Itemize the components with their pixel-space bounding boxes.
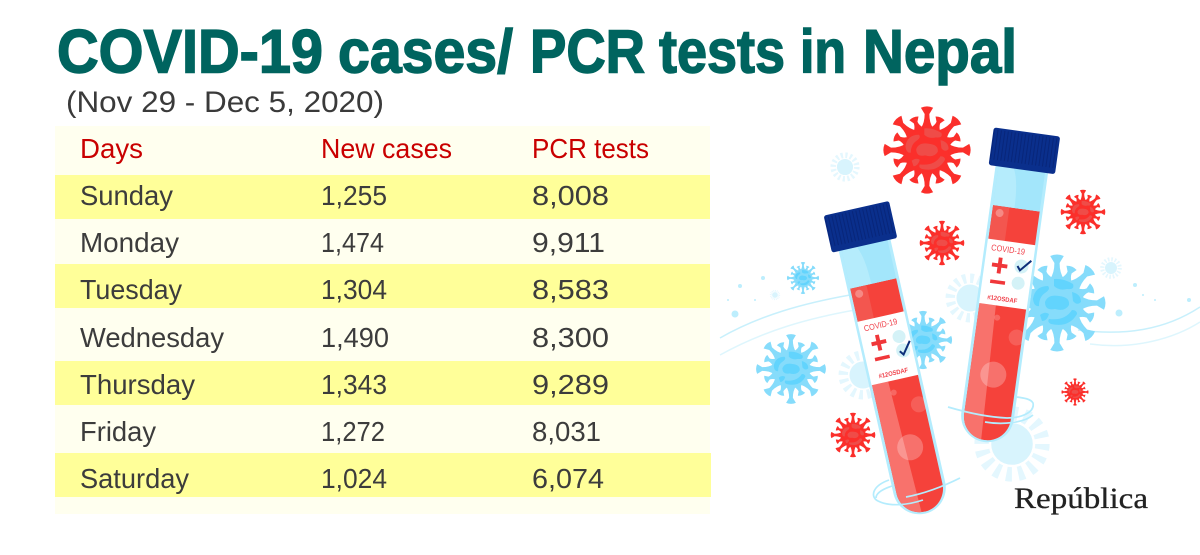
row: Tuesday — [80, 274, 609, 305]
row: Sunday: 1,255 — [321, 180, 387, 211]
icon: check mark — [1014, 259, 1031, 275]
icon: plus — [991, 257, 1008, 274]
row: Friday — [80, 416, 601, 447]
brand: República: República — [1014, 482, 1148, 515]
table header: New cases — [321, 133, 452, 164]
red viruses — [831, 106, 1105, 457]
row: Tuesday: 8,583 — [532, 274, 609, 305]
label text: COVID-19: COVID-19 — [863, 316, 898, 333]
row: Monday: 1,474 — [321, 227, 384, 258]
row: Saturday: 1,024 — [321, 463, 387, 494]
row: Saturday: Saturday — [80, 463, 189, 494]
row: Friday: 8,031 — [532, 416, 601, 447]
icon: minus — [990, 279, 1005, 285]
subtitle: date range: (Nov 29 - Dec 5, 2020) — [66, 86, 384, 119]
row: Wednesday: 8,300 — [532, 322, 609, 353]
row: Wednesday — [80, 322, 609, 353]
swirl rings around tube bases — [873, 397, 1033, 505]
table header: Days — [80, 133, 143, 164]
icon: plus — [870, 333, 888, 352]
row: Monday — [80, 227, 605, 258]
title: PCR — [530, 18, 645, 86]
row: Monday: Monday — [80, 227, 179, 258]
icon: pale circle — [1011, 276, 1025, 291]
row: Saturday: 6,074 — [532, 463, 604, 494]
icon: pale circle — [891, 329, 907, 344]
row: Tuesday: 1,304 — [321, 274, 387, 305]
label text: COVID-19: COVID-19 — [991, 242, 1026, 257]
icon: minus — [875, 355, 890, 361]
row: Sunday: 8,008 — [532, 180, 609, 211]
row: Friday: 1,272 — [321, 416, 385, 447]
title: COVID-19 — [57, 18, 323, 86]
row: Thursday: 9,289 — [532, 369, 609, 400]
illustration: background swirl lines and dots — [720, 276, 1200, 355]
test tube: right — [950, 127, 1060, 451]
blue viruses — [756, 254, 1106, 404]
row: Thursday: 1,343 — [321, 369, 387, 400]
row: Monday: 9,911 — [532, 227, 605, 258]
title: tests — [659, 18, 785, 86]
row: Tuesday: Tuesday — [80, 274, 182, 305]
table header — [80, 133, 649, 164]
row: Thursday: Thursday — [80, 369, 195, 400]
icon: check mark — [895, 341, 913, 359]
title: cases/ — [338, 18, 513, 86]
title: in — [800, 18, 846, 86]
pale viruses — [771, 155, 1120, 474]
row: Thursday — [80, 369, 609, 400]
row: Saturday — [80, 463, 604, 494]
row: Wednesday: 1,490 — [321, 322, 389, 353]
title — [57, 18, 1017, 86]
label text: code: #12OSDAF — [878, 367, 909, 380]
title: Nepal — [863, 18, 1017, 86]
row: Sunday — [80, 180, 609, 211]
label text: code: #12OSDAF — [987, 294, 1018, 305]
test tube: left — [824, 201, 959, 525]
data table — [55, 126, 711, 514]
row: Sunday: Sunday — [80, 180, 173, 211]
row: Friday: Friday — [80, 416, 156, 447]
row: Wednesday: Wednesday — [80, 322, 224, 353]
table header: PCR tests — [532, 133, 649, 164]
